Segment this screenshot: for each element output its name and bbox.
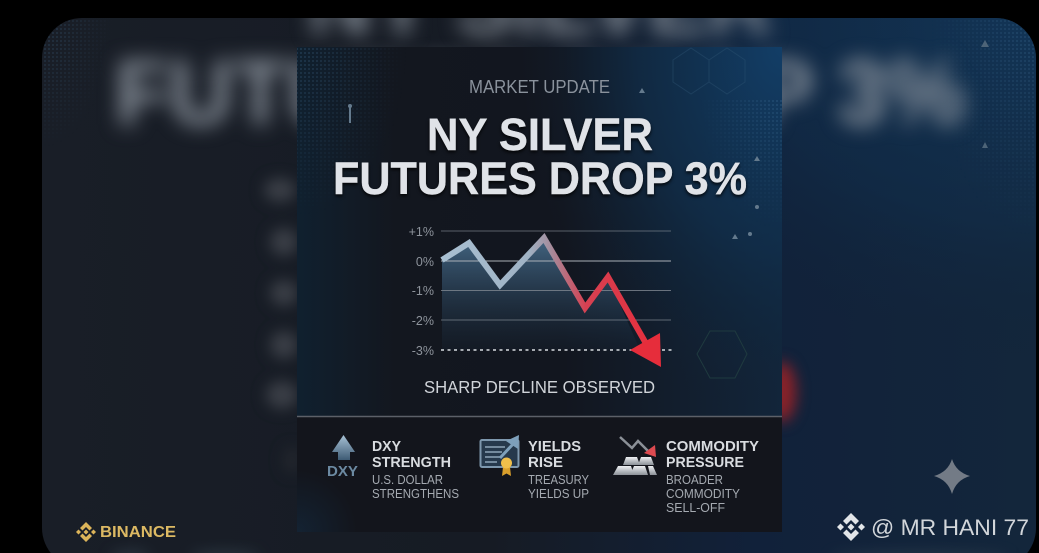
chart caption: SHARP DECLINE OBSERVED bbox=[424, 377, 655, 397]
blurred bottom glow bbox=[110, 551, 1010, 553]
title bbox=[333, 109, 747, 204]
icon: falling arrow over silver bars bbox=[613, 437, 657, 475]
axis labels: -1% bbox=[412, 284, 434, 298]
blurred axis labels bbox=[262, 174, 297, 412]
red arrow head bbox=[630, 333, 661, 367]
commodity heading: COMMODITY bbox=[666, 438, 759, 455]
factor: yields rise bbox=[480, 435, 590, 501]
yields heading: RISE bbox=[528, 454, 563, 471]
decorative hexagons bbox=[673, 48, 745, 94]
DXY description: STRENGTHENS bbox=[372, 487, 459, 501]
factor: DXY strength bbox=[327, 435, 459, 501]
commodity description bbox=[666, 473, 741, 515]
commodity description: COMMODITY bbox=[666, 487, 741, 501]
yields heading bbox=[528, 438, 581, 471]
yields description: YIELDS UP bbox=[528, 487, 589, 501]
blurred red arrow bbox=[768, 362, 796, 422]
axis labels bbox=[409, 225, 434, 358]
axis labels: -3% bbox=[412, 344, 434, 358]
watermark: author handle: @ MR HANI 77 bbox=[871, 515, 1029, 540]
eyebrow: market update: MARKET UPDATE bbox=[469, 77, 610, 97]
decorative markers bbox=[348, 88, 760, 239]
logo: Binance wordmark: BINANCE bbox=[100, 524, 176, 541]
DXY description bbox=[372, 473, 459, 501]
yields description bbox=[528, 473, 590, 501]
DXY description: U.S. DOLLAR bbox=[372, 473, 443, 487]
blurred heading: FUTURES DROP 3%: FUTURES DROP 3% bbox=[115, 42, 965, 144]
title: NY SILVER bbox=[427, 109, 653, 160]
axis labels: 0% bbox=[416, 255, 434, 269]
DXY heading: DXY bbox=[372, 438, 401, 455]
price line bbox=[442, 238, 648, 347]
background triangles bbox=[981, 40, 989, 148]
divider bbox=[297, 416, 782, 418]
axis labels: -2% bbox=[412, 314, 434, 328]
icon: Binance diamond gold bbox=[76, 522, 96, 542]
DXY heading bbox=[372, 438, 451, 471]
yields description: TREASURY bbox=[528, 473, 590, 487]
chart area fill bbox=[442, 238, 640, 350]
commodity heading bbox=[666, 438, 759, 471]
axis labels: +1% bbox=[409, 225, 434, 239]
logo: Binance wordmark bbox=[76, 522, 176, 542]
dashed -3% line bbox=[441, 349, 672, 351]
icon: sparkle star bbox=[934, 459, 970, 494]
title: FUTURES DROP 3% bbox=[333, 153, 747, 204]
DXY heading: STRENGTH bbox=[372, 454, 451, 471]
panel: main poster bbox=[297, 47, 782, 532]
commodity heading: PRESSURE bbox=[666, 454, 744, 471]
commodity description: SELL-OFF bbox=[666, 501, 725, 515]
yields heading: YIELDS bbox=[528, 438, 581, 455]
commodity description: BROADER bbox=[666, 473, 723, 487]
icon: treasury certificate with rising arrow bbox=[480, 435, 519, 476]
line chart: silver futures decline bbox=[409, 225, 672, 367]
icon: DXY up arrow: DXY bbox=[327, 464, 358, 480]
grid lines bbox=[441, 231, 671, 320]
factor: commodity pressure bbox=[613, 437, 759, 515]
icon: Binance diamond white bbox=[837, 513, 865, 541]
